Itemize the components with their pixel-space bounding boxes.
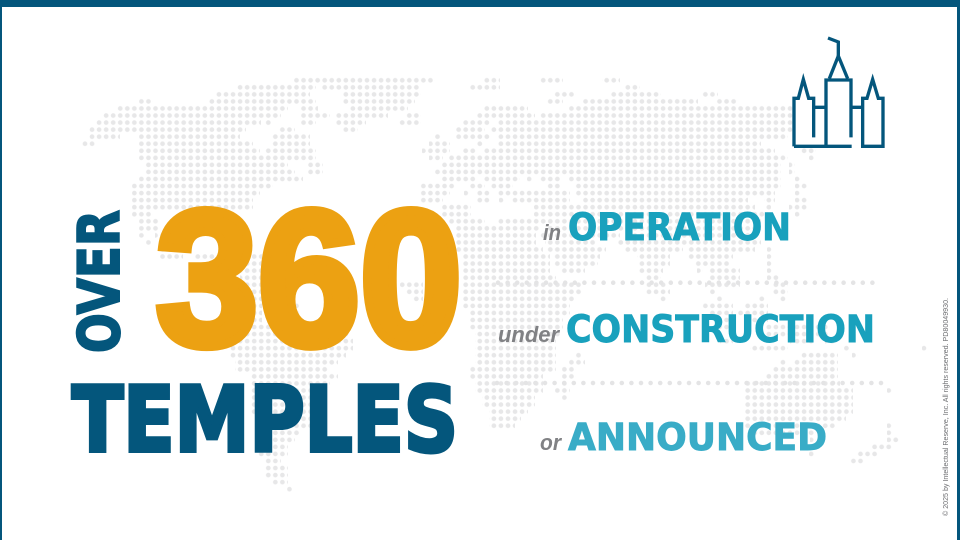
status: in OPERATION: OPERATION — [568, 206, 791, 249]
icon: temple — [794, 38, 883, 146]
big number: 360: 360 — [156, 170, 462, 386]
status: or ANNOUNCED: or — [540, 430, 562, 455]
status: in OPERATION: in — [543, 220, 561, 245]
status: or ANNOUNCED: ANNOUNCED — [568, 416, 827, 459]
map latitude dotted lines — [497, 283, 882, 383]
copyright note: © 2025 by Intellectual Reserve, Inc. All rights reserved. PD80049930. — [941, 298, 950, 516]
dotted world map — [82, 80, 928, 489]
status: under CONSTRUCTION: CONSTRUCTION — [566, 308, 875, 351]
label: TEMPLES: TEMPLES — [72, 368, 458, 473]
status: under CONSTRUCTION: under — [498, 322, 560, 347]
label: OVER (rotated): OVER — [67, 210, 133, 353]
